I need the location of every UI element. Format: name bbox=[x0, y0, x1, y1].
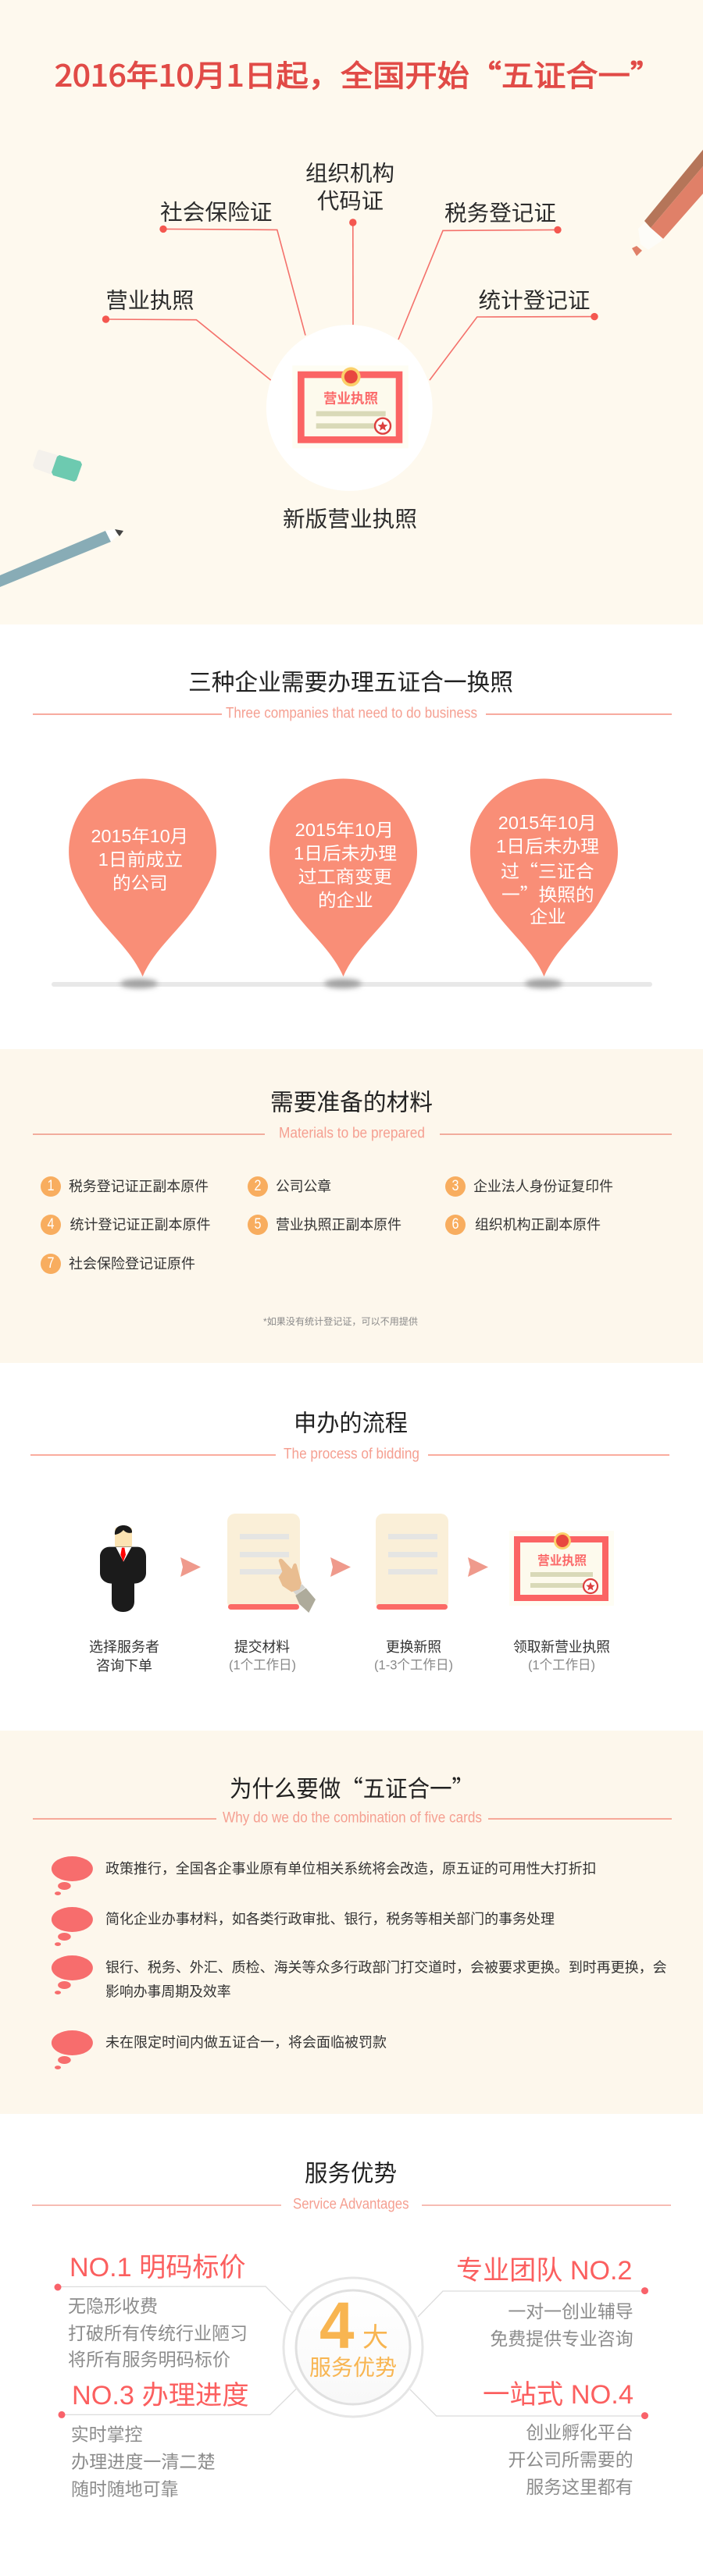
material 7: 社会保险登记证原件 bbox=[69, 1256, 195, 1272]
subheading: Why do we do the combination of five cards bbox=[223, 1809, 482, 1827]
reason 2: 简化企业办事材料，如各类行政审批、银行，税务等相关部门的事务处理 bbox=[105, 1912, 555, 1927]
step 2 label bbox=[229, 1639, 296, 1672]
panel: process bbox=[0, 1363, 703, 1731]
reason 1 bbox=[52, 1856, 596, 1895]
advantage 3: 随时随地可靠 bbox=[71, 2479, 178, 2500]
pin 3: 企业 bbox=[530, 906, 566, 927]
icon: person in suit bbox=[100, 1525, 146, 1612]
advantage 2: 免费提供专业咨询 bbox=[490, 2329, 633, 2349]
material 5: 5 bbox=[255, 1216, 261, 1233]
icon: red marker bbox=[632, 150, 703, 256]
advantage 1: NO.1 明码标价 bbox=[70, 2253, 246, 2282]
pin 1: 的公司 bbox=[112, 873, 168, 893]
pin 1: 2015年10月 bbox=[91, 826, 188, 846]
pin 3: 一”换照的 bbox=[501, 880, 594, 906]
pin shadows bbox=[120, 979, 562, 988]
label: 组织机构代码证: 代码证 bbox=[317, 189, 384, 213]
pin 3 bbox=[470, 779, 618, 977]
pin 2: 过工商变更 bbox=[298, 866, 392, 887]
step 1 label: 咨询下单 bbox=[96, 1658, 152, 1674]
heading: 申办的流程 bbox=[294, 1411, 408, 1436]
pin 3: 1日后未办理 bbox=[496, 836, 599, 856]
pin 2: 的企业 bbox=[318, 890, 373, 910]
material 2 bbox=[248, 1176, 331, 1197]
icon: new licence: 营业执照 bbox=[537, 1553, 587, 1567]
step 2 label: (1个工作日) bbox=[229, 1658, 296, 1672]
step 4 label bbox=[513, 1639, 610, 1672]
heading: 三种企业需要办理五证合一换照 bbox=[188, 670, 513, 696]
reason 3: 银行、税务、外汇、质检、海关等众多行政部门打交道时，会被要求更换。到时再更换，会 bbox=[105, 1960, 667, 1976]
advantage 1 bbox=[68, 2253, 248, 2370]
pin 3: 2015年10月 bbox=[498, 813, 597, 833]
subheading: Three companies that need to do business bbox=[226, 706, 477, 721]
icon: business licence certificate bbox=[292, 365, 409, 448]
material 5: 营业执照正副本原件 bbox=[276, 1217, 401, 1233]
material 7: 7 bbox=[47, 1255, 55, 1272]
material 6: 组织机构正副本原件 bbox=[475, 1217, 601, 1233]
step 3 label: (1-3个工作日) bbox=[374, 1658, 453, 1672]
label: 组织机构代码证: 组织机构 bbox=[305, 161, 394, 186]
material 2: 2 bbox=[255, 1178, 261, 1194]
material 4 bbox=[41, 1215, 211, 1235]
footnote: *如果没有统计登记证，可以不用提供 bbox=[263, 1315, 418, 1327]
pin 1: 1日前成立 bbox=[98, 849, 183, 870]
reason 4: 未在限定时间内做五证合一，将会面临被罚款 bbox=[105, 2035, 387, 2051]
advantage 2: 专业团队 NO.2 bbox=[456, 2256, 632, 2286]
icon: blue pencil bbox=[0, 529, 123, 587]
reason 3 bbox=[52, 1955, 667, 2000]
step 1 label bbox=[89, 1639, 159, 1674]
material 2: 公司公章 bbox=[276, 1179, 331, 1194]
connector lines: five certificates to new licence bbox=[106, 222, 594, 380]
white circle with new licence bbox=[266, 325, 433, 491]
material 4: 4 bbox=[47, 1216, 55, 1233]
advantage 3: 实时掌控 bbox=[71, 2425, 142, 2445]
material 3 bbox=[445, 1176, 613, 1197]
reason 2 bbox=[52, 1907, 555, 1946]
material 5 bbox=[248, 1215, 401, 1235]
reason 3: 影响办事周期及效率 bbox=[105, 1984, 231, 2000]
panel: why bbox=[0, 1731, 703, 2114]
icon: business licence certificate: 营业执照 bbox=[323, 390, 378, 406]
advantage 3: 办理进度一清二楚 bbox=[71, 2451, 216, 2471]
arrow 1 bbox=[180, 1557, 201, 1577]
arrow 2 bbox=[330, 1557, 351, 1577]
icon: document bbox=[376, 1514, 448, 1610]
step 2 label: 提交材料 bbox=[234, 1639, 290, 1655]
step 3 label bbox=[374, 1639, 453, 1672]
advantage 2: 一对一创业辅导 bbox=[508, 2301, 633, 2322]
reason 1: 政策推行，全国各企事业原有单位相关系统将会改造，原五证的可用性大打折扣 bbox=[105, 1861, 597, 1877]
center badge: 4 bbox=[319, 2289, 355, 2362]
panel: materials bbox=[0, 1049, 703, 1363]
material 3: 3 bbox=[451, 1178, 459, 1194]
panel: hero background bbox=[0, 0, 703, 624]
advantage 3: NO.3 办理进度 bbox=[72, 2381, 249, 2411]
advantage 1: 打破所有传统行业陋习 bbox=[68, 2323, 248, 2343]
material 1: 税务登记证正副本原件 bbox=[69, 1179, 209, 1194]
material 7 bbox=[41, 1254, 195, 1274]
step 3 label: 更换新照 bbox=[386, 1639, 441, 1655]
advantage 1: 无隐形收费 bbox=[68, 2296, 158, 2316]
label: 营业执照: 营业执照 bbox=[106, 289, 194, 312]
pin 3: 过“三证合 bbox=[501, 856, 594, 883]
icon: eraser bbox=[33, 450, 82, 482]
icon: document with hand bbox=[227, 1514, 316, 1613]
panel: three companies bbox=[0, 624, 703, 1049]
center badge bbox=[284, 2278, 423, 2417]
label: 税务登记证: 税务登记证 bbox=[444, 201, 556, 225]
material 6 bbox=[445, 1215, 601, 1235]
material 3: 企业法人身份证复印件 bbox=[473, 1179, 613, 1194]
material 6: 6 bbox=[451, 1216, 459, 1233]
connector lines bbox=[58, 2286, 645, 2416]
ground bar bbox=[52, 982, 652, 987]
step 4 label: 领取新营业执照 bbox=[513, 1639, 610, 1655]
advantage 2 bbox=[456, 2256, 633, 2349]
pin 2 bbox=[269, 779, 417, 977]
label: 组织机构代码证 bbox=[305, 161, 394, 213]
arrow 3 bbox=[468, 1557, 488, 1577]
advantage 4 bbox=[483, 2380, 633, 2497]
center badge: 大 bbox=[362, 2323, 388, 2353]
material 1 bbox=[41, 1176, 209, 1197]
reason 4 bbox=[52, 2030, 387, 2069]
step 1 label: 选择服务者 bbox=[89, 1639, 159, 1655]
center badge: 服务优势 bbox=[309, 2356, 397, 2379]
heading: 为什么要做“五证合一” bbox=[230, 1770, 474, 1804]
pin 1 bbox=[69, 779, 216, 977]
pin 2: 1日后未办理 bbox=[294, 843, 397, 863]
advantage 4: 开公司所需要的 bbox=[508, 2450, 633, 2470]
connector dots bbox=[102, 219, 598, 323]
advantage 1: 将所有服务明码标价 bbox=[68, 2350, 230, 2370]
advantage 3 bbox=[71, 2381, 249, 2500]
subheading: Service Advantages bbox=[293, 2197, 409, 2212]
panel: service advantages bbox=[0, 2114, 703, 2576]
heading: 需要准备的材料 bbox=[270, 1090, 433, 1116]
connector dots bbox=[55, 2284, 648, 2419]
label: 社会保险证: 社会保险证 bbox=[160, 200, 272, 225]
advantage 4: 创业孵化平台 bbox=[526, 2422, 633, 2443]
label: 新版营业执照: 新版营业执照 bbox=[283, 507, 417, 531]
pin 2: 2015年10月 bbox=[295, 820, 394, 840]
step 4 label: (1个工作日) bbox=[528, 1658, 595, 1672]
subheading: The process of bidding bbox=[284, 1446, 419, 1463]
main title: 2016年10月1日起，全国开始“五证合一” bbox=[55, 52, 662, 95]
material 4: 统计登记证正副本原件 bbox=[70, 1217, 211, 1233]
material 1: 1 bbox=[47, 1178, 55, 1194]
label: 统计登记证: 统计登记证 bbox=[478, 289, 591, 312]
heading: 服务优势 bbox=[305, 2161, 397, 2187]
advantage 4: 服务这里都有 bbox=[526, 2477, 633, 2497]
advantage 4: 一站式 NO.4 bbox=[483, 2380, 633, 2410]
icon: new licence bbox=[509, 1531, 614, 1606]
subheading: Materials to be prepared bbox=[279, 1126, 425, 1141]
